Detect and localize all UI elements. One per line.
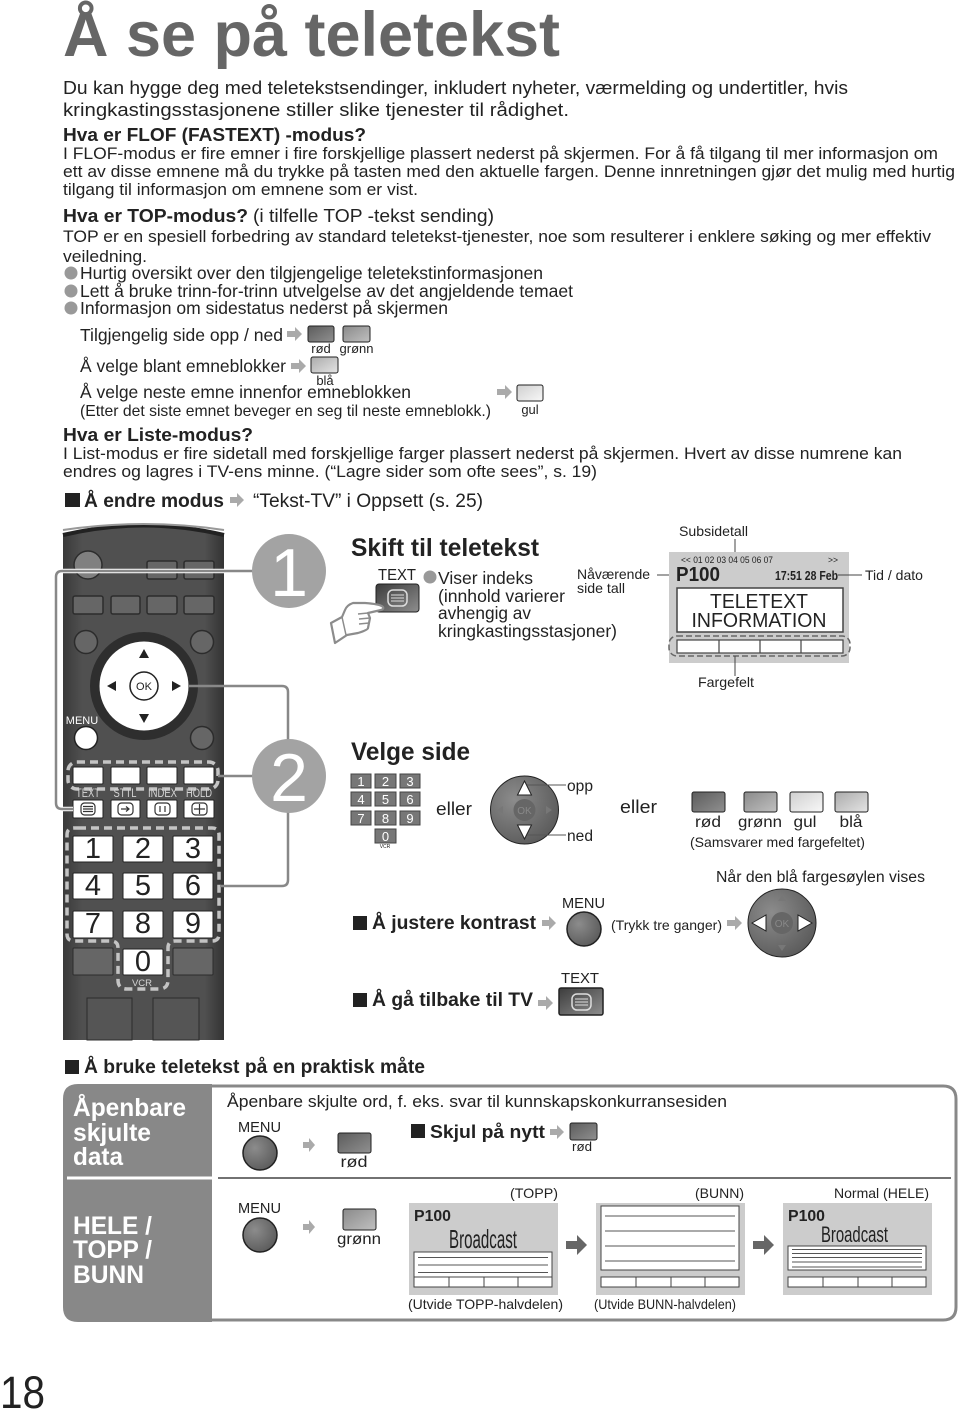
sidebar label: full top bottom: BUNN xyxy=(73,1261,144,1289)
intro text xyxy=(63,78,848,120)
note: blue bar: Når den blå fargesøylen vises xyxy=(716,869,925,886)
number keys: 5 xyxy=(135,870,151,902)
colour button row: rød xyxy=(695,814,721,831)
teletext function labels: STTL xyxy=(114,788,137,800)
number keys xyxy=(73,833,213,989)
reveal row: Åpenbare skjulte ord, f. eks. svar til kunnskapskonkurransesiden xyxy=(227,1092,727,1111)
OK navigation wheel xyxy=(90,632,198,740)
title: Å se på teletekst xyxy=(63,0,560,70)
left/right navigation wheel: OK xyxy=(775,919,790,930)
screen: top half xyxy=(408,1185,563,1312)
colour button row xyxy=(690,792,868,850)
bullet list: Informasjon om sidestatus nederst på skjermen xyxy=(80,298,448,318)
colour key instructions: Å velge blant emneblokker xyxy=(80,356,286,376)
section: TOP mode: TOP er en spesiell forbedring av standard teletekst-tjenester, noe som resulterer i enklere søking og mer effektiv xyxy=(63,227,932,246)
back to TV instruction: TEXT xyxy=(561,970,599,987)
screen: top half: Broadcast xyxy=(449,1224,517,1254)
section: List mode: I List-modus er fire sidetall med forskjellige farger plassert nederst på skjermen. Hvert av disse numrene kan xyxy=(63,444,902,463)
back to TV instruction: Å gå tilbake til TV xyxy=(372,990,533,1011)
teletext screen diagram: << 01 02 03 04 05 06 07 xyxy=(681,555,773,566)
teletext screen diagram: 17:51 28 Feb xyxy=(775,568,838,583)
screen: normal full: P100 xyxy=(788,1208,825,1225)
top buttons xyxy=(73,551,214,750)
section: TOP mode: Hva er TOP-modus? xyxy=(63,206,248,226)
step 1 badge: 1 xyxy=(270,535,308,611)
teletext function labels xyxy=(76,788,212,800)
number keys: 6 xyxy=(185,870,201,902)
section: List mode xyxy=(63,425,902,481)
sidebar label: full top bottom: TOPP / xyxy=(73,1236,152,1264)
colour key instructions xyxy=(80,325,543,420)
mini keypad: 4 xyxy=(357,792,365,807)
step 1 description: avhengig av xyxy=(438,603,531,623)
intro text: kringkastingsstasjonene stiller slike tjenester til rådighet. xyxy=(63,100,569,120)
mini keypad: 5 xyxy=(382,792,389,807)
colour button row: gul xyxy=(794,814,816,831)
full top bottom controls xyxy=(238,1201,381,1252)
bullet list: Hurtig oversikt over den tilgjengelige teletekstinformasjonen xyxy=(80,263,543,283)
lower remote panels xyxy=(87,998,132,1040)
left/right navigation wheel xyxy=(748,889,816,957)
section: FLOF mode: I FLOF-modus er fire emner i fire forskjellige plassert nederst på skjermen. For å få tilgang til mer informasjon om xyxy=(63,144,938,163)
screen: normal full xyxy=(783,1185,932,1295)
colour key instructions: gul xyxy=(521,402,539,417)
number keys: VCR xyxy=(132,978,152,989)
text: or: eller xyxy=(620,797,657,817)
colour key instructions: (Etter det siste emnet beveger en seg til neste emneblokk.) xyxy=(80,403,491,420)
mini keypad: 6 xyxy=(406,792,414,807)
full top bottom controls: MENU xyxy=(238,1201,281,1217)
TEXT button with hand xyxy=(331,567,419,643)
text: or: eller xyxy=(436,799,472,819)
sidebar label: reveal xyxy=(73,1093,186,1171)
callout: current page: side tall xyxy=(577,580,625,596)
remote control xyxy=(63,524,224,1040)
up/down navigation wheel: opp xyxy=(567,778,593,795)
colour button row: grønn xyxy=(738,814,782,831)
colour button row: blå xyxy=(840,813,863,831)
intro text: Du kan hygge deg med teletekstsendinger, inkludert nyheter, værmelding og undertitler, hvis xyxy=(63,78,848,98)
sidebar label: full top bottom: HELE / xyxy=(73,1212,152,1240)
change mode line: “Tekst-TV” i Oppsett (s. 25) xyxy=(253,491,483,512)
bullet list: Lett å bruke trinn-for-trinn utvelgelse av det angjeldende temaet xyxy=(80,281,573,301)
number keys: 4 xyxy=(85,870,101,902)
mini keypad: 3 xyxy=(406,774,414,789)
section: FLOF mode: Hva er FLOF (FASTEXT) -modus? xyxy=(63,125,366,145)
number keys: 9 xyxy=(185,908,201,940)
colour key instructions: Å velge neste emne innenfor emneblokken xyxy=(80,382,411,402)
sidebar label: full top bottom xyxy=(73,1212,152,1289)
number keys: 3 xyxy=(185,833,201,865)
callout: colour field xyxy=(698,656,754,690)
section: FLOF mode: tilgang til informasjon om emnene som er vist. xyxy=(63,180,418,199)
teletext screen diagram: INFORMATION xyxy=(692,609,826,632)
callout: current page: Nåværende xyxy=(577,566,650,582)
colour button row: (Samsvarer med fargefeltet) xyxy=(690,834,865,850)
screen: normal full: Broadcast xyxy=(821,1222,888,1247)
section: TOP mode: veiledning. xyxy=(63,247,147,266)
icon: pointing hand xyxy=(331,603,383,643)
screen: top half: (TOPP) xyxy=(510,1185,558,1201)
practical use heading: Å bruke teletekst på en praktisk måte xyxy=(84,1057,425,1078)
full top bottom controls: grønn xyxy=(337,1231,381,1248)
screen: bottom half: (Utvide BUNN-halvdelen) xyxy=(594,1296,736,1312)
step 1 description: (innhold varierer xyxy=(438,586,565,606)
number keys: 0 xyxy=(135,946,151,978)
panel: practical use xyxy=(63,1084,956,1322)
colour key instructions: grønn xyxy=(340,341,373,356)
mini keypad: 8 xyxy=(382,811,389,826)
mini keypad: 0 xyxy=(382,829,389,844)
step 1 heading: Skift til teletekst xyxy=(351,534,540,562)
section: TOP mode: (i tilfelle TOP -tekst sending) xyxy=(253,206,494,226)
bullet list xyxy=(64,263,573,318)
teletext function labels: INDEX xyxy=(148,788,177,800)
screen: top half: (Utvide TOPP-halvdelen) xyxy=(408,1296,563,1312)
up/down navigation wheel: OK xyxy=(517,806,532,817)
contrast instruction: MENU xyxy=(562,896,605,912)
reveal row: MENU xyxy=(238,1120,281,1136)
reveal row xyxy=(227,1092,727,1171)
colour buttons xyxy=(73,767,214,784)
teletext screen diagram: TELETEXT xyxy=(710,590,808,613)
step 1 description: kringkastingsstasjoner) xyxy=(438,621,617,641)
callout: subpage number xyxy=(679,523,748,558)
step 2 badge: 2 xyxy=(270,740,308,816)
screen: bottom half: (BUNN) xyxy=(695,1185,744,1201)
remote body xyxy=(63,526,224,1040)
mini keypad: 7 xyxy=(357,811,365,826)
number keys: 8 xyxy=(135,908,151,940)
MENU button: MENU xyxy=(66,715,98,727)
step 1 badge xyxy=(252,534,326,611)
contrast instruction xyxy=(353,889,816,957)
number keys: 1 xyxy=(85,833,101,865)
section: FLOF mode: ett av disse emnene må du trykke på tasten med den aktuelle fargen. Denne innretningen gjør det mulig med hurtig xyxy=(63,162,955,181)
teletext screen diagram: >> xyxy=(828,555,838,566)
reveal row: rød xyxy=(340,1154,368,1171)
contrast instruction: (Trykk tre ganger) xyxy=(611,917,722,933)
screen: top half: P100 xyxy=(414,1208,451,1225)
up/down navigation wheel xyxy=(490,776,593,845)
section: FLOF mode xyxy=(63,125,955,199)
section: List mode: endres og lagres i TV-ens minne. (“Lagre sider som ofte sees”, s. 19) xyxy=(63,462,597,481)
step 2 heading: Velge side xyxy=(351,738,470,766)
arrow xyxy=(566,1235,587,1255)
teletext function labels: HOLD xyxy=(186,788,212,800)
number keys: 7 xyxy=(85,908,101,940)
colour key instructions: Tilgjengelig side opp / ned xyxy=(80,325,283,345)
OK navigation wheel: OK xyxy=(136,681,153,693)
callout: colour field: Fargefelt xyxy=(698,674,754,690)
mini keypad: 1 xyxy=(357,774,365,789)
callout: current page xyxy=(577,566,676,596)
callout: subpage number: Subsidetall xyxy=(679,523,748,539)
teletext function buttons xyxy=(73,800,214,818)
callout: time and date: Tid / dato xyxy=(865,567,923,583)
teletext screen diagram xyxy=(577,523,923,690)
colour key instructions: rød xyxy=(311,341,331,356)
reveal row: rød xyxy=(572,1139,592,1154)
reveal row: Skjul på nytt xyxy=(430,1121,545,1142)
connector lines xyxy=(56,571,288,886)
change mode line: Å endre modus xyxy=(84,491,224,512)
screen: bottom half xyxy=(594,1185,745,1312)
back to TV instruction xyxy=(353,970,603,1015)
TEXT button with hand: TEXT xyxy=(378,567,416,584)
mini keypad: 9 xyxy=(406,811,414,826)
contrast instruction: Å justere kontrast xyxy=(372,913,537,934)
step 2 badge xyxy=(252,739,326,816)
change mode line xyxy=(65,491,483,512)
colour key instructions: blå xyxy=(316,373,334,388)
arrow xyxy=(753,1235,774,1255)
teletext function labels: TEXT xyxy=(76,788,100,800)
screen panel xyxy=(669,552,849,663)
sidebar label: reveal: data xyxy=(73,1143,124,1171)
section: TOP mode xyxy=(63,206,932,266)
sidebar label: reveal: skjulte xyxy=(73,1119,151,1147)
step 1 description xyxy=(424,568,617,641)
up/down navigation wheel: ned xyxy=(567,828,593,845)
sidebar label: reveal: Åpenbare xyxy=(73,1093,186,1122)
mini keypad: 2 xyxy=(382,774,389,789)
mini keypad: VCR xyxy=(380,844,391,850)
callout: time and date xyxy=(838,567,923,583)
step 1 description: Viser indeks xyxy=(438,568,533,588)
panel frame xyxy=(212,1086,956,1320)
screen: normal full: Normal (HELE) xyxy=(834,1185,929,1201)
mini keypad xyxy=(351,774,420,850)
number keys: 2 xyxy=(135,833,151,865)
section: List mode: Hva er Liste-modus? xyxy=(63,425,253,445)
teletext screen diagram: P100 xyxy=(676,564,720,586)
